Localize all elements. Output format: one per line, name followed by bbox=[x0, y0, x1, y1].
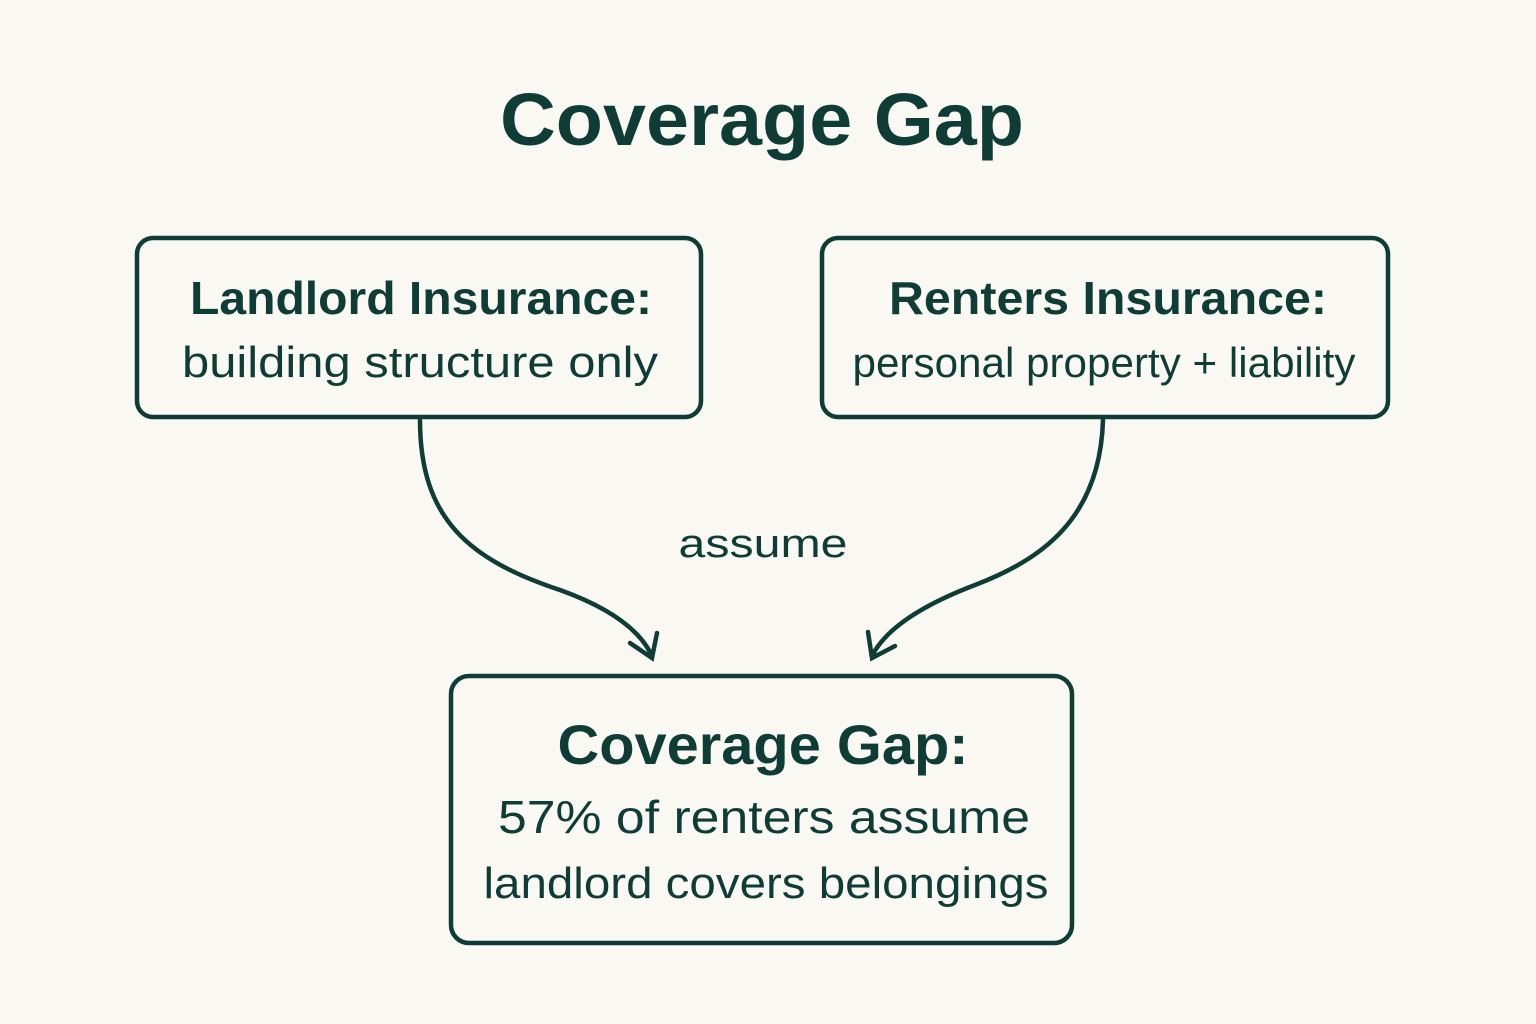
title: Coverage Gap bbox=[500, 78, 1024, 161]
panel: coverage gap: landlord covers belongings bbox=[484, 859, 1048, 908]
panel: landlord insurance: Landlord Insurance: bbox=[190, 272, 652, 324]
panel: coverage gap: 57% of renters assume bbox=[498, 791, 1030, 843]
panel: landlord insurance bbox=[137, 238, 701, 417]
panel: coverage gap: Coverage Gap: bbox=[558, 713, 968, 776]
arrow: landlord to gap bbox=[420, 420, 657, 658]
panel: coverage gap bbox=[451, 676, 1072, 943]
panel: renters insurance: Renters Insurance: bbox=[889, 272, 1327, 324]
panel: landlord insurance: building structure only bbox=[182, 338, 658, 387]
arrow: renters to gap bbox=[868, 420, 1103, 658]
label: assume: assume bbox=[678, 522, 848, 566]
panel: renters insurance bbox=[822, 238, 1388, 417]
panel: renters insurance: personal property + liability bbox=[852, 339, 1356, 386]
